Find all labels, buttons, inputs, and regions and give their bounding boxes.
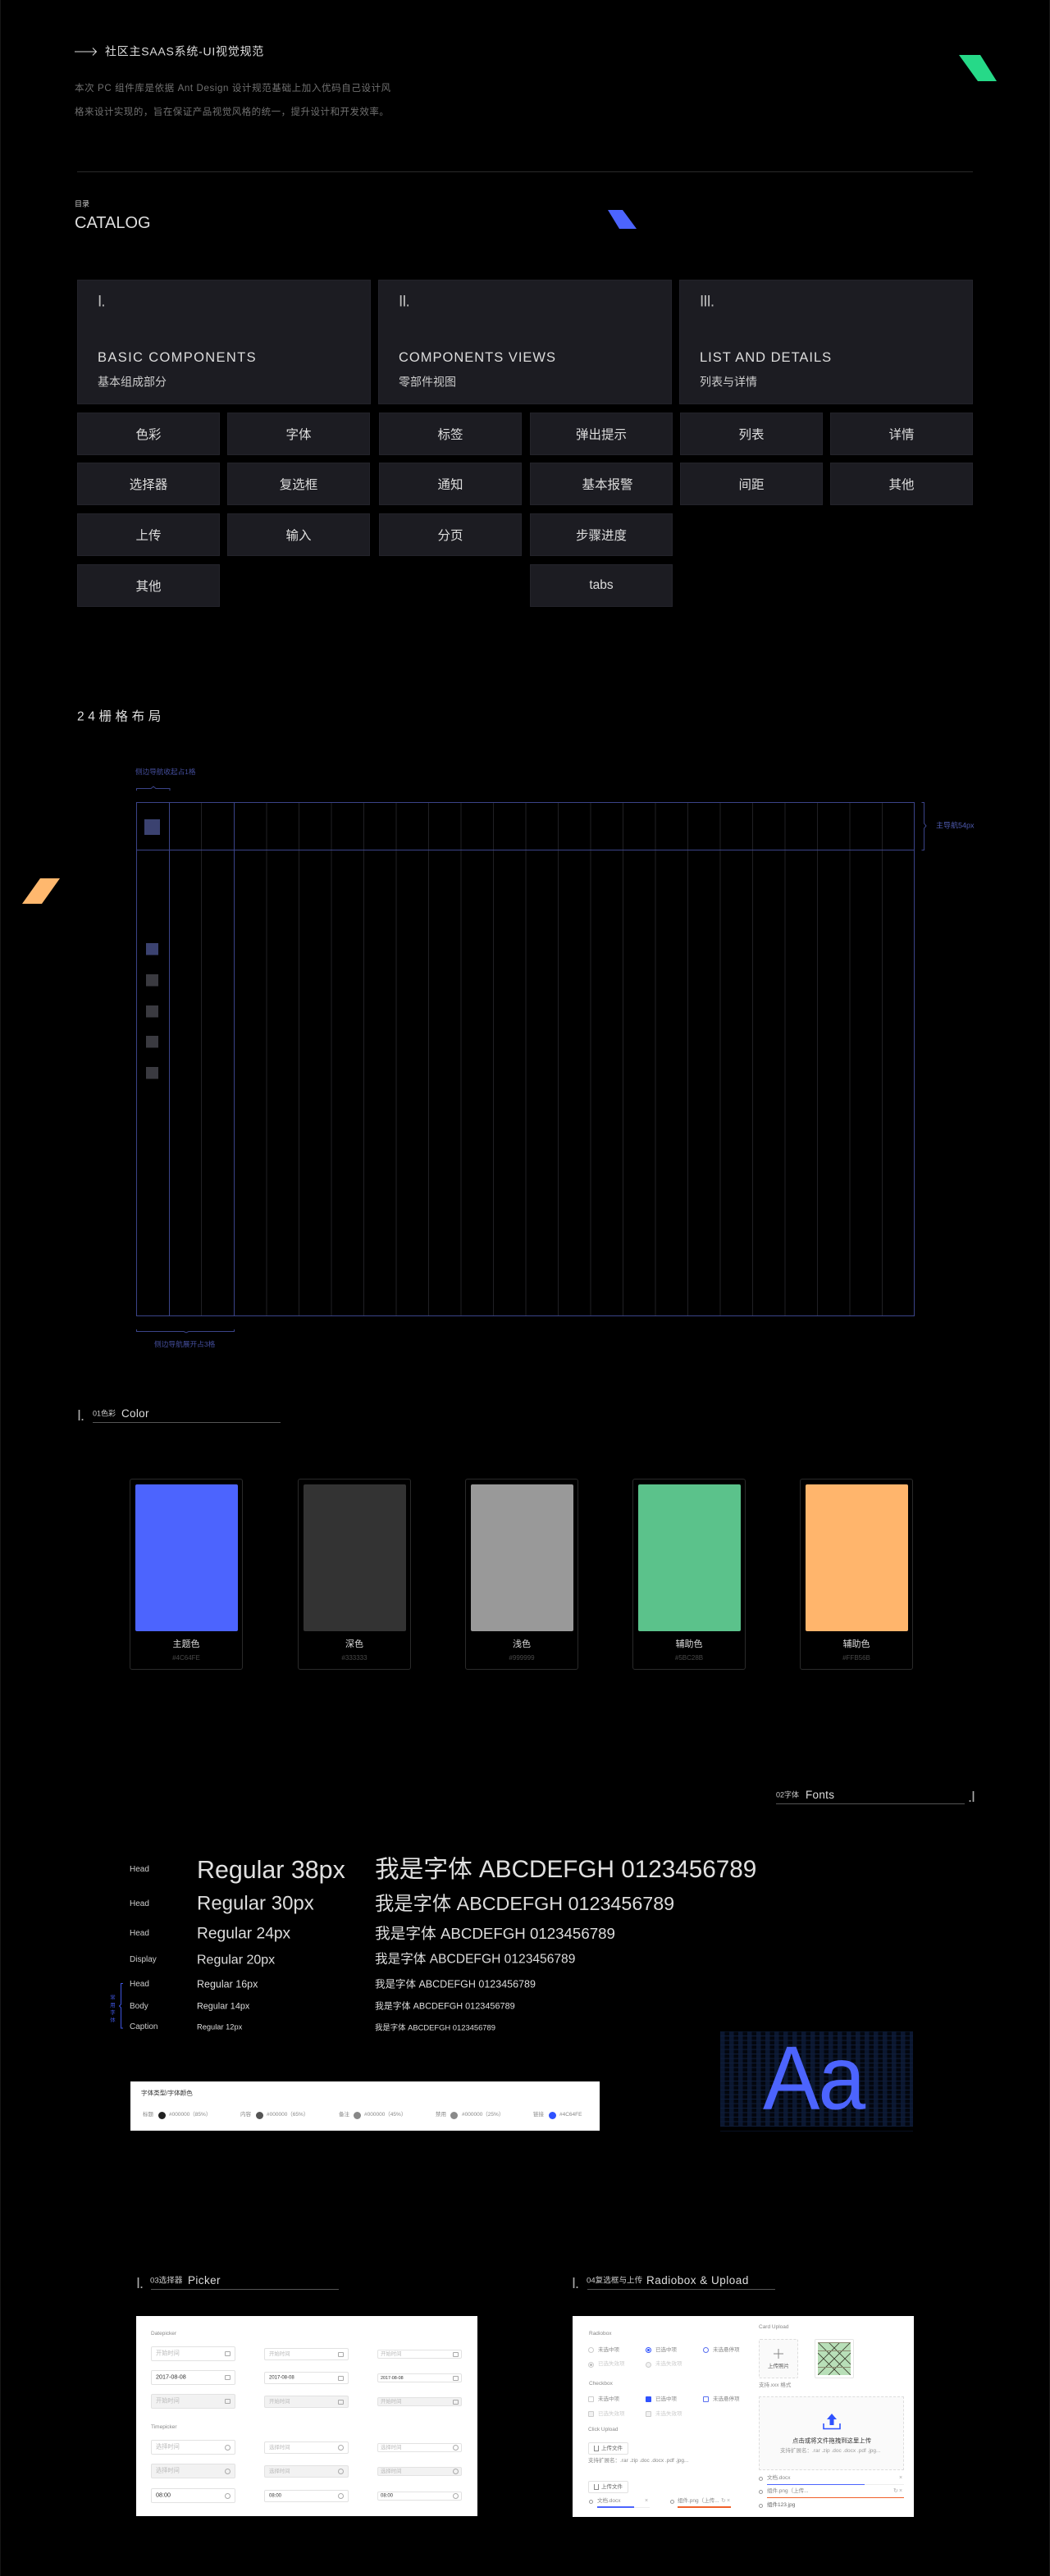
time input large placeholder: 选择时间 — [156, 2443, 180, 2451]
catalog link: pagination: 分页 — [437, 529, 463, 543]
catalog link: alerts: 基本报警 — [582, 478, 633, 492]
color item: link — [533, 2111, 582, 2119]
catalog card: list and details: 列表与详情 — [700, 376, 757, 389]
catalog link: details: 详情 — [888, 428, 914, 442]
radio options: 已选中项 — [655, 2347, 677, 2353]
panel: font colors — [130, 2081, 600, 2131]
catalog link: upload — [77, 513, 220, 556]
drag and drop zone — [759, 2396, 904, 2470]
type row 16px: Regular 16px — [197, 1978, 258, 1990]
grid section heading: 24栅格布局 — [77, 710, 165, 724]
type row 24px — [130, 1925, 615, 1942]
file row: in progress: × — [645, 2498, 648, 2504]
catalog link: spacing — [680, 463, 823, 505]
panel title: 字体类型/字体颜色 — [141, 2089, 193, 2096]
type row 16px: Head — [130, 1980, 149, 1989]
time input large value — [151, 2488, 235, 2503]
catalog link: color — [77, 413, 220, 455]
date input medium disabled — [264, 2396, 349, 2408]
date input large placeholder — [151, 2346, 235, 2361]
section heading: picker: I. — [136, 2275, 143, 2291]
catalog card: list and details: LIST AND DETAILS — [700, 350, 832, 365]
time input medium disabled — [264, 2465, 349, 2478]
time input medium value — [264, 2490, 349, 2502]
date input large disabled: 开始时间 — [156, 2397, 180, 2405]
color card: auxiliary green: #5BC28B — [675, 1654, 703, 1662]
catalog heading — [75, 200, 151, 232]
date input medium value: 2017-08-08 — [269, 2375, 294, 2380]
date input small value — [377, 2373, 462, 2382]
section heading: radiobox and upload — [572, 2274, 775, 2291]
color card: primary: #4C64FE — [172, 1654, 200, 1662]
upload button with files — [588, 2481, 628, 2493]
section heading: picker: 03选择器 — [150, 2276, 182, 2285]
panel: radiobox, checkbox and upload — [573, 2316, 914, 2517]
section heading: picker: Picker — [188, 2274, 221, 2286]
sidebar item: active — [146, 943, 158, 955]
decoration: green parallelogram — [959, 55, 997, 81]
datepicker label: Datepicker — [151, 2331, 176, 2337]
type specimen Aa on grid — [720, 2031, 913, 2127]
time input large disabled — [151, 2464, 235, 2478]
file row: in progress — [759, 2475, 904, 2485]
color item: disabled: #000000（25%） — [462, 2112, 504, 2118]
section heading: fonts — [776, 1789, 975, 1805]
uploaded image thumbnail — [815, 2339, 854, 2378]
catalog card: basic components: 基本组成部分 — [98, 376, 167, 389]
time input medium disabled: 选择时间 — [269, 2469, 290, 2474]
icon: plus — [774, 2349, 783, 2359]
color item: title: 标题 — [143, 2112, 153, 2118]
file row: in progress — [589, 2498, 650, 2508]
time input large value: 08:00 — [156, 2492, 171, 2499]
catalog link: popups — [530, 413, 673, 455]
catalog card: list and details: III. — [700, 294, 714, 311]
upload button with files: 上传文件 — [601, 2484, 623, 2490]
type row 20px — [130, 1952, 575, 1967]
type row 30px: Regular 30px — [197, 1893, 314, 1915]
catalog link: fonts — [227, 413, 370, 455]
file row: in progress: 文档.docx — [597, 2498, 621, 2504]
catalog link: others: 其他 — [135, 580, 161, 594]
color item: link: 链接 — [533, 2112, 544, 2118]
section heading: fonts: 02字体 — [776, 1791, 799, 1799]
date input small placeholder: 开始时间 — [381, 2351, 402, 2357]
upload button: 上传文件 — [601, 2446, 623, 2451]
upload hint: 支持扩展名：.rar .zip .doc .docx .pdf .jpg... — [588, 2458, 688, 2464]
time input small disabled: 选择时间 — [381, 2469, 402, 2474]
color card: primary — [130, 1479, 243, 1670]
catalog link: others: 其他 — [888, 478, 914, 492]
type row 20px: Regular 20px — [197, 1953, 275, 1967]
catalog card: basic components: I. — [98, 294, 105, 311]
file row: failed: ↻ — [721, 2498, 726, 2504]
file row: finished: 组件123.jpg — [767, 2502, 795, 2508]
time input large disabled: 选择时间 — [156, 2467, 180, 2474]
type row 24px: Head — [130, 1929, 149, 1938]
color item: note: #000000（45%） — [364, 2112, 406, 2118]
catalog link: input — [227, 513, 370, 556]
drag and drop zone: 支持扩展名：.rar .zip .doc .docx .pdf .jpg... — [780, 2448, 880, 2454]
catalog link: notification — [379, 463, 522, 505]
catalog link: steps: 步骤进度 — [576, 529, 627, 543]
section heading: radiobox and upload: I. — [572, 2275, 578, 2291]
color item: disabled — [436, 2111, 504, 2119]
catalog card: basic components — [77, 280, 371, 404]
vertical label: 常用字体 — [109, 1995, 115, 2025]
click upload label: Click Upload — [588, 2427, 619, 2432]
file row: in progress: × — [899, 2475, 902, 2481]
catalog link: checkbox: 复选框 — [280, 478, 317, 492]
card upload label: Card Upload — [759, 2324, 789, 2330]
sidebar item — [146, 1005, 158, 1017]
catalog link: upload: 上传 — [135, 529, 161, 543]
time input small value: 08:00 — [381, 2493, 393, 2498]
catalog heading: 目录 — [75, 200, 89, 208]
checkbox label: Checkbox — [589, 2381, 613, 2387]
file row: in progress: 文档.docx — [767, 2475, 791, 2481]
color card: auxiliary green: 辅助色 — [676, 1639, 702, 1649]
type row 30px: 我是字体 ABCDEFGH 0123456789 — [375, 1893, 674, 1914]
sidebar item — [146, 974, 158, 986]
common fonts annotation — [109, 1983, 123, 2029]
catalog link: tabs — [530, 564, 673, 607]
file row: failed — [759, 2488, 904, 2498]
section heading: fonts: .I — [968, 1789, 975, 1805]
checkbox options — [588, 2396, 740, 2417]
decoration: blue parallelogram — [608, 210, 637, 229]
type row 16px — [130, 1978, 536, 1990]
catalog link: spacing: 间距 — [738, 478, 765, 492]
color card: primary: 主题色 — [172, 1639, 200, 1649]
checkbox options: 未选悬停项 — [713, 2396, 740, 2402]
type row 14px — [130, 2001, 515, 2012]
time input small disabled — [377, 2467, 462, 2476]
catalog link: tabs: tabs — [589, 578, 614, 592]
section heading: picker — [136, 2274, 339, 2291]
color item: content — [240, 2111, 308, 2119]
color item: note: 备注 — [339, 2112, 349, 2118]
type row 12px: Caption — [130, 2022, 158, 2031]
date input small disabled — [377, 2397, 462, 2406]
color card: auxiliary orange — [800, 1479, 913, 1670]
file row: failed: × — [727, 2498, 730, 2504]
catalog link: list — [680, 413, 823, 455]
catalog link: tags — [379, 413, 522, 455]
intro paragraph: 本次 PC 组件库是依据 Ant Design 设计规范基础上加入优码自己设计风 — [75, 84, 391, 93]
sidebar item — [146, 1067, 158, 1079]
intro paragraph: 格来设计实现的，旨在保证产品视觉风格的统一，提升设计和开发效率。 — [75, 107, 389, 117]
catalog link: list: 列表 — [738, 428, 765, 442]
catalog card: list and details — [679, 280, 973, 404]
color card: light: #999999 — [509, 1654, 535, 1662]
catalog link: steps — [530, 513, 673, 556]
radio options: 已选失效项 — [598, 2361, 625, 2367]
date input large value — [151, 2370, 235, 2385]
color item: content: 内容 — [240, 2112, 251, 2118]
checkbox options: 已选失效项 — [598, 2411, 625, 2417]
drag and drop zone: 点击或将文件拖拽到这里上传 — [792, 2437, 871, 2445]
color card: auxiliary orange: #FFB56B — [842, 1654, 870, 1662]
grid note: expanded side nav: 侧边导航展开占3格 — [154, 1340, 215, 1348]
time input medium placeholder — [264, 2442, 349, 2454]
type row 12px — [130, 2022, 495, 2031]
radio options: 未选失效项 — [655, 2361, 682, 2367]
date input small value: 2017-08-08 — [381, 2375, 404, 2380]
catalog link: pagination — [379, 513, 522, 556]
catalog card: components views: COMPONENTS VIEWS — [399, 350, 556, 365]
checkbox options: 未选失效项 — [655, 2411, 682, 2417]
radio options: 未选悬停项 — [713, 2347, 740, 2353]
catalog link: others — [77, 564, 220, 607]
time input medium value: 08:00 — [269, 2493, 281, 2498]
color item: title — [143, 2111, 211, 2119]
type row 30px: Head — [130, 1899, 149, 1908]
type row 14px: Regular 14px — [197, 2002, 249, 2012]
grid note: main nav height: 主导航54px — [936, 822, 975, 830]
type row 24px: Regular 24px — [197, 1925, 290, 1942]
date input medium placeholder: 开始时间 — [269, 2351, 290, 2357]
catalog card: components views: 零部件视图 — [399, 376, 456, 389]
radio options — [588, 2347, 740, 2368]
color card: dark — [298, 1479, 411, 1670]
section heading: color: Color — [121, 1407, 149, 1420]
catalog heading: CATALOG — [75, 214, 151, 232]
section heading: radiobox and upload: 04复选框与上传 — [587, 2276, 642, 2285]
catalog link: details — [830, 413, 973, 455]
date input large placeholder: 开始时间 — [156, 2350, 180, 2357]
timepicker label: Timepicker — [151, 2424, 177, 2430]
catalog link: popups: 弹出提示 — [576, 428, 627, 442]
title text: 社区主SAAS系统-UI视觉规范 — [105, 45, 264, 58]
time input medium placeholder: 选择时间 — [269, 2445, 290, 2451]
color card: light: 浅色 — [513, 1639, 531, 1649]
type row 16px: 我是字体 ABCDEFGH 0123456789 — [375, 1978, 536, 1990]
color card: dark: 深色 — [345, 1639, 363, 1649]
icon: upload — [823, 2414, 841, 2429]
type row 30px — [130, 1893, 674, 1915]
catalog link: checkbox — [227, 463, 370, 505]
time input small placeholder: 选择时间 — [381, 2445, 402, 2451]
header logo placeholder — [144, 819, 160, 835]
type row 38px: 我是字体 ABCDEFGH 0123456789 — [375, 1856, 756, 1883]
file row: failed: ↻ — [893, 2488, 898, 2494]
date input small placeholder — [377, 2350, 462, 2359]
catalog link: alerts — [530, 463, 673, 505]
icon: arrow — [75, 48, 97, 56]
type row 14px: 我是字体 ABCDEFGH 0123456789 — [375, 2001, 515, 2011]
type row 24px: 我是字体 ABCDEFGH 0123456789 — [375, 1925, 615, 1942]
catalog card: components views — [378, 280, 672, 404]
catalog link: picker: 选择器 — [130, 478, 167, 492]
date input medium value — [264, 2372, 349, 2384]
color card: auxiliary green — [632, 1479, 746, 1670]
bracket: expanded nav width — [136, 1329, 235, 1333]
color card: auxiliary orange: 辅助色 — [843, 1639, 870, 1649]
intro paragraph — [75, 83, 391, 117]
type row 12px: 我是字体 ABCDEFGH 0123456789 — [375, 2022, 495, 2031]
catalog link: fonts: 字体 — [285, 428, 312, 442]
section heading: fonts: Fonts — [806, 1789, 834, 1801]
time input small value — [377, 2492, 462, 2501]
color card: light — [465, 1479, 578, 1670]
catalog link: picker — [77, 463, 220, 505]
grid note: collapsed side nav: 侧边导航收起占1格 — [135, 768, 196, 776]
file row: failed: × — [899, 2488, 902, 2494]
date input small disabled: 开始时间 — [381, 2399, 402, 2405]
catalog card: components views: II. — [399, 294, 409, 311]
date input medium disabled: 开始时间 — [269, 2399, 290, 2405]
file row: failed — [670, 2498, 731, 2508]
catalog card: basic components: BASIC COMPONENTS — [98, 350, 257, 365]
color card: dark: #333333 — [341, 1654, 368, 1662]
sidebar item — [146, 1036, 158, 1048]
catalog link: notification: 通知 — [437, 478, 463, 492]
color item: content: #000000（65%） — [267, 2112, 308, 2118]
section heading: color: 01色彩 — [93, 1410, 116, 1418]
type row 38px: Head — [130, 1865, 149, 1874]
header title with arrow — [75, 45, 264, 58]
section heading: radiobox and upload: Radiobox & Upload — [646, 2274, 749, 2286]
radiobox label: Radiobox — [589, 2331, 611, 2337]
type row 38px: Regular 38px — [197, 1856, 345, 1884]
section heading: color — [77, 1407, 281, 1424]
catalog link: tags: 标签 — [437, 428, 463, 442]
checkbox options: 未选中项 — [598, 2396, 619, 2402]
panel: picker — [136, 2316, 477, 2516]
type row 20px: Display — [130, 1955, 157, 1964]
upload button — [588, 2442, 628, 2455]
color item: disabled: 禁用 — [436, 2112, 446, 2118]
catalog link: color: 色彩 — [135, 428, 161, 442]
upload tile: 上传照片 — [768, 2364, 789, 2369]
catalog link: others — [830, 463, 973, 505]
card upload hint: 支持.xxx 格式 — [759, 2382, 791, 2388]
color item: link: #4C64FE — [559, 2112, 582, 2118]
bracket: main nav height — [922, 802, 926, 850]
chart: 24-column grid layout — [136, 786, 927, 1334]
time input small placeholder — [377, 2443, 462, 2452]
radio options: 未选中项 — [598, 2347, 619, 2353]
file row: failed: 组件.png（上传... — [678, 2498, 719, 2504]
date input large value: 2017-08-08 — [156, 2373, 186, 2381]
decoration: orange parallelogram — [22, 878, 60, 904]
time input large placeholder — [151, 2440, 235, 2455]
type scale table — [130, 1856, 756, 2031]
catalog link: input: 输入 — [285, 529, 312, 543]
file row: failed: 组件.png（上传... — [767, 2488, 809, 2494]
date input medium placeholder — [264, 2348, 349, 2360]
bracket — [118, 1983, 123, 2029]
checkbox options: 已选中项 — [655, 2396, 677, 2402]
type specimen Aa on grid: Aa — [763, 2028, 864, 2129]
type row 20px: 我是字体 ABCDEFGH 0123456789 — [375, 1953, 575, 1967]
bracket: collapsed nav width — [136, 786, 170, 791]
section heading: color: I. — [77, 1407, 84, 1424]
type row 12px: Regular 12px — [197, 2022, 242, 2031]
color item: title: #000000（85%） — [169, 2112, 211, 2118]
type row 38px — [130, 1856, 756, 1884]
date input large disabled — [151, 2394, 235, 2409]
color item: note — [339, 2111, 406, 2119]
type row 14px: Body — [130, 2002, 148, 2011]
upload tile — [759, 2339, 798, 2378]
